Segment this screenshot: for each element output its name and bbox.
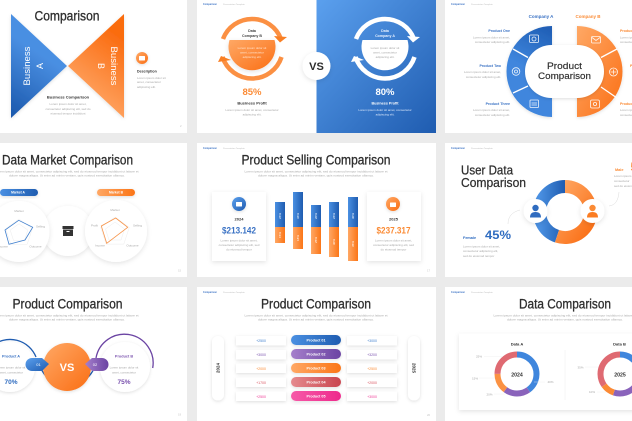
subtitle (494, 314, 632, 322)
card: 2024: 2024 (235, 216, 244, 222)
triangle: business A (11, 14, 67, 118)
centre label: Product (547, 61, 582, 72)
centre product pills: Product 04 (306, 380, 326, 384)
bar chart (275, 192, 358, 261)
VS circle: VS (60, 362, 74, 374)
right value cards: +3200 (367, 353, 377, 357)
circle chart: company A: adipiscing elit. (376, 55, 395, 59)
product B circle (100, 342, 150, 392)
header (203, 147, 246, 150)
centre product pills: Product 05 (306, 394, 326, 398)
product A circle: 70% (4, 379, 18, 386)
product B circle: amet, consectetur (112, 370, 136, 374)
product labels left: Lorem ipsum dolor sit amet, (473, 36, 510, 40)
ring dividers (513, 49, 617, 98)
product A circle: Product A (2, 354, 20, 358)
product labels left: Product Two (480, 64, 502, 68)
company labels (529, 14, 601, 19)
page number: 2 (180, 124, 182, 128)
header: Presentation Template (223, 291, 246, 294)
triangle: business A: A (35, 63, 45, 69)
header: Comparison (203, 291, 217, 294)
subtitle: Lorem ipsum dolor sit amet, consectetur adipiscing elit, sed do eiusmod tempor incididunt ut labore et (244, 314, 388, 318)
radar chart: market B: Income (95, 244, 105, 248)
product labels left: Lorem ipsum dolor sit amet, (464, 70, 501, 74)
business profit left: Business Profit (237, 100, 267, 106)
title: Product Comparison (12, 296, 122, 312)
VS badge: VS (309, 61, 324, 73)
card: 2025 (367, 192, 421, 261)
subtitle: Lorem ipsum dolor sit amet, consectetur adipiscing elit, sed do eiusmod tempor incididunt ut labore et (494, 314, 632, 318)
business profit right: adipiscing elit. (376, 112, 395, 116)
company labels: Company B (575, 14, 601, 19)
page number: 19 (178, 412, 182, 416)
triangle: business B: B (96, 63, 106, 69)
business profit right (358, 102, 412, 116)
header: Presentation Template (471, 3, 494, 6)
donut chart: data B (577, 342, 632, 394)
female stat: sed do eiusmod tempor (463, 254, 494, 258)
business comparison text (45, 94, 91, 116)
left value cards: +3000 (256, 353, 266, 357)
product labels right (620, 29, 632, 117)
year pill 2025 (408, 336, 420, 400)
pill: market B (97, 189, 135, 196)
header: Comparison (451, 147, 465, 150)
centre product pills: Product 03 (306, 366, 326, 370)
product labels left: consectetur adipiscing elit. (466, 75, 501, 79)
subtitle (0, 314, 139, 322)
title: User Data (461, 164, 513, 178)
subtitle: dolore magna aliqua. Ut enim ad minim veniam, quis nostrud exercitation ullamco. (258, 318, 374, 322)
header (451, 147, 494, 150)
subtitle: dolore magna aliqua. Ut enim ad minim veniam, quis nostrud exercitation ullamco. (507, 318, 623, 322)
donut chart: data A: 20% (486, 392, 493, 396)
product labels left: Product One (488, 29, 510, 33)
centre label (525, 45, 604, 98)
bar chart: 30% (332, 239, 336, 245)
panel: data comparison (445, 287, 632, 421)
donut chart: data A: Data A (511, 342, 523, 346)
title: Data Market Comparison (2, 152, 133, 168)
title: Product Selling Comparison (242, 152, 390, 168)
female stat: consectetur adipiscing elit, (463, 249, 498, 253)
product labels left: Lorem ipsum dolor sit amet, (473, 108, 510, 112)
bar chart: 20% (314, 213, 318, 219)
page number: 17 (427, 268, 431, 272)
description text (137, 70, 166, 89)
circle chart: company A: amet, consectetur (373, 50, 397, 54)
card: 2024: do eiusmod tempor (226, 248, 252, 252)
subtitle: dolore magna aliqua. Ut enim ad minim veniam, quis nostrud exercitation ullamco. (9, 318, 125, 322)
description text: Description (137, 70, 157, 74)
business comparison text: consectetur adipiscing elit, sed do (45, 107, 91, 111)
card: 2025: consectetur adipiscing elit, sed (373, 243, 414, 247)
subtitle: dolore magna aliqua. Ut enim ad minim veniam, quis nostrud exercitation ullamco. (9, 174, 125, 178)
right value cards: +3000 (367, 395, 377, 399)
title: Comparison (34, 8, 100, 24)
VS badge (302, 52, 330, 80)
triangle: business B (68, 14, 124, 118)
chart divider (564, 350, 566, 400)
subtitle: dolore magna aliqua. Ut enim ad minim veniam, quis nostrud exercitation ullamco. (258, 174, 374, 178)
radar chart: market B: Profit (91, 224, 98, 228)
header (451, 291, 494, 294)
radar chart: market A: Outcome (29, 244, 42, 248)
radar chart: market B: Selling (133, 224, 142, 228)
pill: market A: Market A (11, 191, 26, 195)
title: Comparison (461, 176, 526, 190)
circle chart: company B: Data (248, 29, 257, 33)
donut chart: data B: Data B (613, 342, 626, 346)
ring icons (512, 35, 618, 108)
header (203, 291, 246, 294)
ring: company A half (506, 26, 552, 117)
female stat: Female (463, 236, 476, 240)
card: 2024 (212, 192, 266, 261)
panel: data market comparison (0, 143, 187, 277)
card: 2025: $237.317 (376, 226, 410, 236)
donut chart (540, 186, 591, 237)
card: 2025: 2025 (389, 216, 399, 222)
title (461, 164, 526, 190)
subtitle (244, 314, 388, 322)
description text: Lorem ipsum dolor sit (137, 76, 166, 80)
title: Data Comparison (519, 296, 611, 312)
donut chart: data A: 40% (547, 380, 554, 384)
pill: market A (0, 189, 38, 196)
circle chart: company B: adipiscing elit. (243, 55, 262, 59)
bar chart: 30% (351, 213, 355, 219)
radar chart: market A (0, 201, 50, 262)
left value cards: +2000 (256, 367, 266, 371)
circle chart: company A: Lorem ipsum dolor sit (371, 46, 400, 50)
radar chart: market A: Selling (36, 224, 45, 228)
business comparison text: Business Comparison (47, 94, 90, 100)
badge 01 (26, 358, 49, 371)
right value cards: +2000 (367, 381, 377, 385)
product B circle: 75% (117, 379, 131, 386)
bar chart: 26% (278, 213, 282, 219)
product labels left (464, 29, 510, 117)
left value cards: +2500 (256, 339, 266, 343)
connector arrows (508, 192, 619, 224)
business profit left (225, 100, 279, 116)
donut chart: data A (472, 342, 554, 396)
header: Comparison (451, 3, 465, 6)
female stat: Lorem ipsum dolor sit amet, (463, 244, 500, 248)
bar chart: 18% (296, 235, 300, 241)
triangle: business A: Business (22, 46, 32, 86)
bar chart: 15% (278, 232, 282, 238)
left value cards (236, 336, 286, 401)
donut chart: data B: 10% (589, 390, 595, 394)
circle chart: company B: amet, consectetur (240, 50, 264, 54)
stat: 80 percent: 80% (375, 87, 395, 98)
right value cards (347, 336, 397, 401)
circle chart: company A (351, 19, 420, 78)
connecting arcs (0, 334, 153, 386)
donut chart: data A: 2024 (511, 372, 523, 378)
panel: data company VS (197, 0, 436, 133)
card: 2024: consectetur adipiscing elit, sed (219, 243, 260, 247)
centre product pills: Product 02 (306, 352, 326, 356)
triangle: business B: Business (109, 46, 119, 86)
product labels left: Product Three (486, 102, 510, 106)
panel: product table comparison (197, 287, 436, 421)
male stat: Male (615, 168, 623, 172)
bar chart: 36% (296, 213, 300, 219)
page number: 20 (427, 413, 431, 417)
product B circle: Lorem ipsum dolor sit (110, 366, 138, 370)
panel: product comparison ring (445, 0, 632, 133)
donut chart: data A: 15% (472, 376, 478, 380)
badge 02 (85, 358, 109, 371)
header (451, 3, 494, 6)
description text: amet, consectetur (137, 80, 161, 84)
left value cards: +1700 (256, 381, 266, 385)
radar chart: market B: Market (110, 208, 120, 212)
business profit right: Business Profit (371, 102, 399, 106)
centre product pills: Product 01 (306, 338, 326, 342)
bar chart: 35% (351, 241, 355, 247)
radar chart: market B (85, 200, 147, 262)
VS circle (43, 343, 91, 391)
product B circle: Product B (115, 354, 133, 358)
right value cards: +2500 (367, 367, 377, 371)
circle chart: company A: Data (381, 29, 390, 33)
radar chart: market A: Market (14, 209, 24, 213)
subtitle (0, 170, 139, 178)
donut chart: data B: 35% (577, 366, 584, 370)
business comparison text: Lorem ipsum dolor sit amet, (49, 102, 87, 106)
left value cards: +2500 (256, 395, 266, 399)
male badge (580, 199, 604, 223)
year pill 2025: 2025 (412, 363, 416, 374)
donut chart: data B: 2025 (614, 372, 626, 378)
bar chart: 26% (332, 213, 336, 219)
header: Presentation Template (223, 3, 246, 6)
radar chart: market B: Outcome (126, 244, 139, 248)
description text: adipiscing elit. (137, 85, 156, 89)
middle circle with icon (43, 206, 93, 256)
company labels: Company A (529, 14, 554, 19)
pill: market B: Market B (109, 191, 124, 195)
badge 02: 02 (93, 362, 98, 367)
card: 2025: Lorem ipsum dolor sit amet, (375, 238, 412, 242)
circle chart: company B: Company B (242, 34, 262, 38)
circle chart: company B (218, 19, 287, 78)
header: Comparison (203, 147, 217, 150)
business profit left: Lorem ipsum dolor sit amet, consectetur (225, 108, 279, 112)
business comparison text: eiusmod tempor incididunt (50, 112, 86, 116)
stat: 85 percent: 85% (242, 87, 262, 98)
circle chart: company B: Lorem ipsum dolor sit (238, 46, 266, 50)
subtitle (244, 170, 388, 178)
panel: user data comparison (445, 143, 632, 277)
circle chart: company A: Company A (375, 34, 395, 38)
title: Product Comparison (261, 296, 371, 312)
header: Presentation Template (471, 147, 494, 150)
female stat: 45% (485, 228, 511, 242)
panel: product comparison VS (0, 287, 187, 421)
male stat (614, 160, 632, 188)
icon: folder (136, 52, 148, 64)
ring: company B half (577, 26, 622, 117)
product A circle (0, 342, 35, 392)
header: Comparison (451, 291, 465, 294)
chart card (459, 334, 632, 410)
donut chart: data A: 25% (476, 354, 482, 358)
business profit left: adipiscing elit. (243, 112, 262, 116)
business profit right: Lorem ipsum dolor sit amet, consectetur (358, 108, 412, 112)
badge 01: 01 (36, 362, 41, 367)
card: 2024: Lorem ipsum dolor sit amet, (220, 238, 258, 242)
product labels left: consectetur adipiscing elit. (475, 40, 510, 44)
card: 2025: do eiusmod tempor (381, 248, 406, 252)
header: Comparison (203, 3, 217, 6)
female stat (463, 228, 511, 258)
header (203, 3, 246, 6)
year pill 2024: 2024 (216, 362, 220, 373)
header: Presentation Template (223, 147, 246, 150)
header: Presentation Template (471, 291, 494, 294)
centre label: Comparison (538, 71, 591, 82)
female badge (524, 199, 548, 223)
centre product pills (291, 335, 341, 401)
subtitle: Lorem ipsum dolor sit amet, consectetur adipiscing elit, sed do eiusmod tempor incididunt ut labore et (244, 170, 388, 174)
page number: 15 (178, 268, 182, 272)
male stat: consectetur (614, 179, 630, 183)
bar chart: 25% (314, 237, 318, 243)
panel: product selling comparison (197, 143, 436, 277)
product labels left: consectetur adipiscing elit. (475, 113, 510, 117)
right value cards: +3000 (367, 339, 377, 343)
card: 2024: $213.142 (222, 226, 256, 236)
year pill 2024 (212, 336, 224, 400)
panel: comparison triangles (0, 0, 187, 133)
